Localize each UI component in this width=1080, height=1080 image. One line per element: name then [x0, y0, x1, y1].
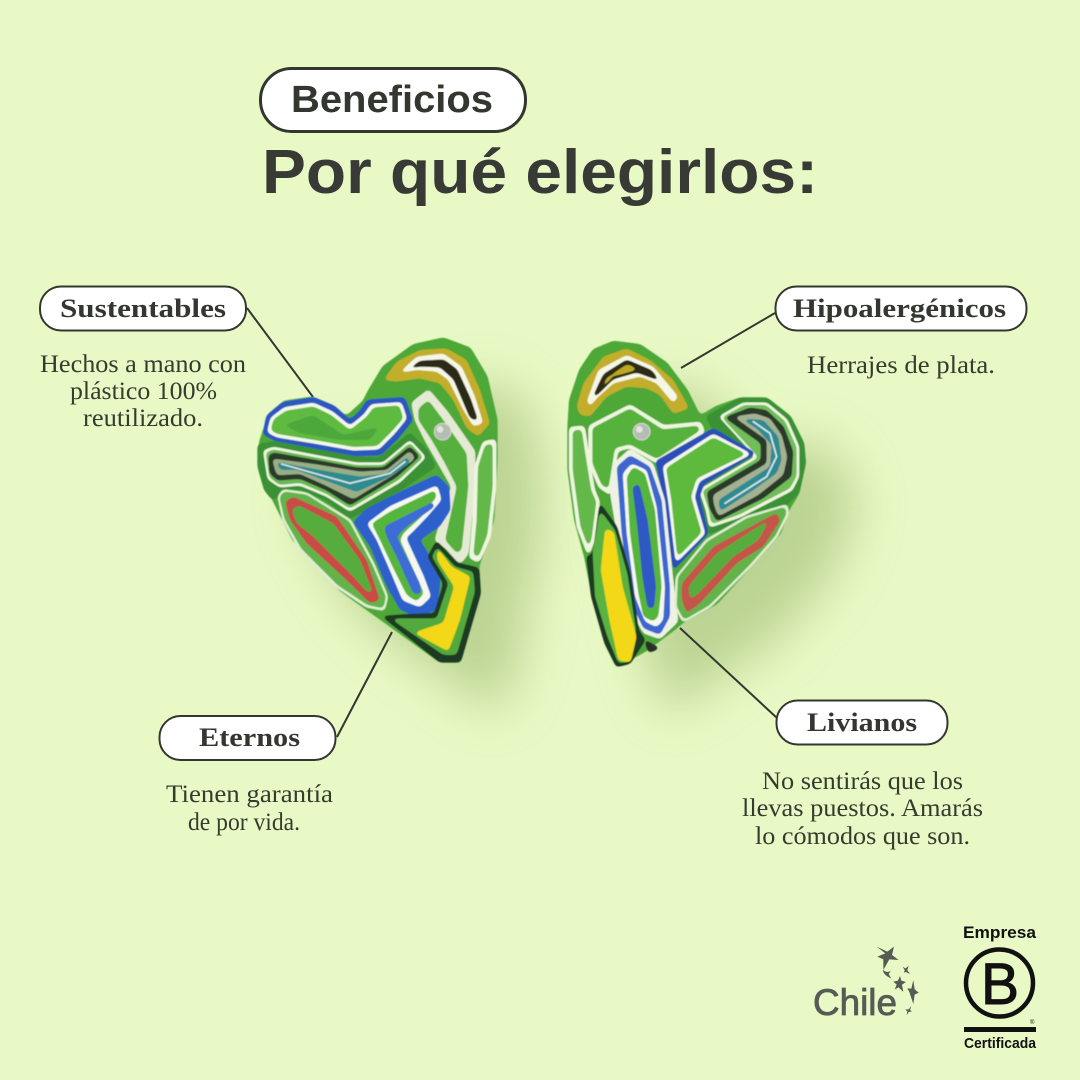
logo: Chile [813, 947, 919, 1023]
logo: Empresa B Certificada: ® [1030, 1019, 1035, 1026]
text block: Livianos [742, 768, 983, 850]
text block: Eternos: Tienen garantía [166, 781, 333, 808]
text block: Livianos: No sentirás que los [762, 768, 963, 795]
logo: Empresa B Certificada: Empresa [963, 923, 1037, 942]
right sliver [471, 441, 495, 561]
connector line: Eternos [337, 632, 392, 737]
teal nested band [697, 398, 805, 533]
red nested band [278, 490, 387, 610]
blue-outlined central green panel [657, 429, 754, 568]
logo: Empresa B Certificada: Certificada [964, 1035, 1037, 1052]
text block: Eternos: de por vida. [188, 809, 300, 836]
label pill: Hipoalergénicos [776, 286, 1026, 330]
text block: Eternos [166, 781, 333, 836]
olive band [577, 348, 689, 417]
right earring [568, 342, 805, 667]
yellow corner band [383, 542, 480, 662]
white-outlined central green panel [413, 392, 473, 562]
text block: Sustentables: reutilizado. [83, 405, 203, 432]
label pill: Hipoalergénicos: Hipoalergénicos [793, 294, 1006, 323]
connector line: Sustentables [247, 308, 313, 397]
logo: Chile: Chile [813, 982, 897, 1023]
text block: Sustentables: plástico 100% [70, 378, 217, 405]
yellow band [587, 503, 661, 667]
left sliver [571, 427, 598, 553]
shadow: right earring [618, 387, 855, 712]
text block: Livianos: lo cómodos que son. [755, 823, 970, 850]
label pill: Sustentables: Sustentables [60, 294, 226, 323]
connector line: Hipoalergénicos [681, 313, 775, 368]
label pill: Eternos [160, 716, 336, 760]
label pill: Sustentables [40, 286, 246, 330]
label pill: Livianos [776, 700, 948, 744]
heading pill: Beneficios: Beneficios [291, 79, 493, 121]
white-outlined top green panel [590, 406, 703, 493]
blue L-shaped band [353, 474, 451, 617]
label pill: Livianos: Livianos [807, 708, 917, 737]
text block: Sustentables [40, 351, 247, 432]
olive band [383, 348, 490, 437]
text block: Livianos: llevas puestos. Amarás [742, 795, 983, 822]
title: Por qué elegirlos: [262, 138, 818, 207]
blue-outlined top green panel [265, 399, 411, 454]
logo: Empresa B Certificada: B [981, 952, 1019, 1017]
teal nested band [258, 433, 435, 518]
text block: Hipoalergénicos: Herrajes de plata. [807, 352, 995, 379]
heading pill: Beneficios [260, 68, 526, 132]
shadow: left earring [303, 383, 542, 707]
blue oval band [610, 448, 678, 639]
label pill: Eternos: Eternos [199, 723, 300, 752]
left earring [258, 338, 497, 662]
red nested band [675, 505, 788, 622]
logo: Empresa B Certificada [963, 923, 1037, 1052]
text block: Sustentables: Hechos a mano con [40, 351, 247, 378]
connector line: Livianos [680, 628, 777, 718]
